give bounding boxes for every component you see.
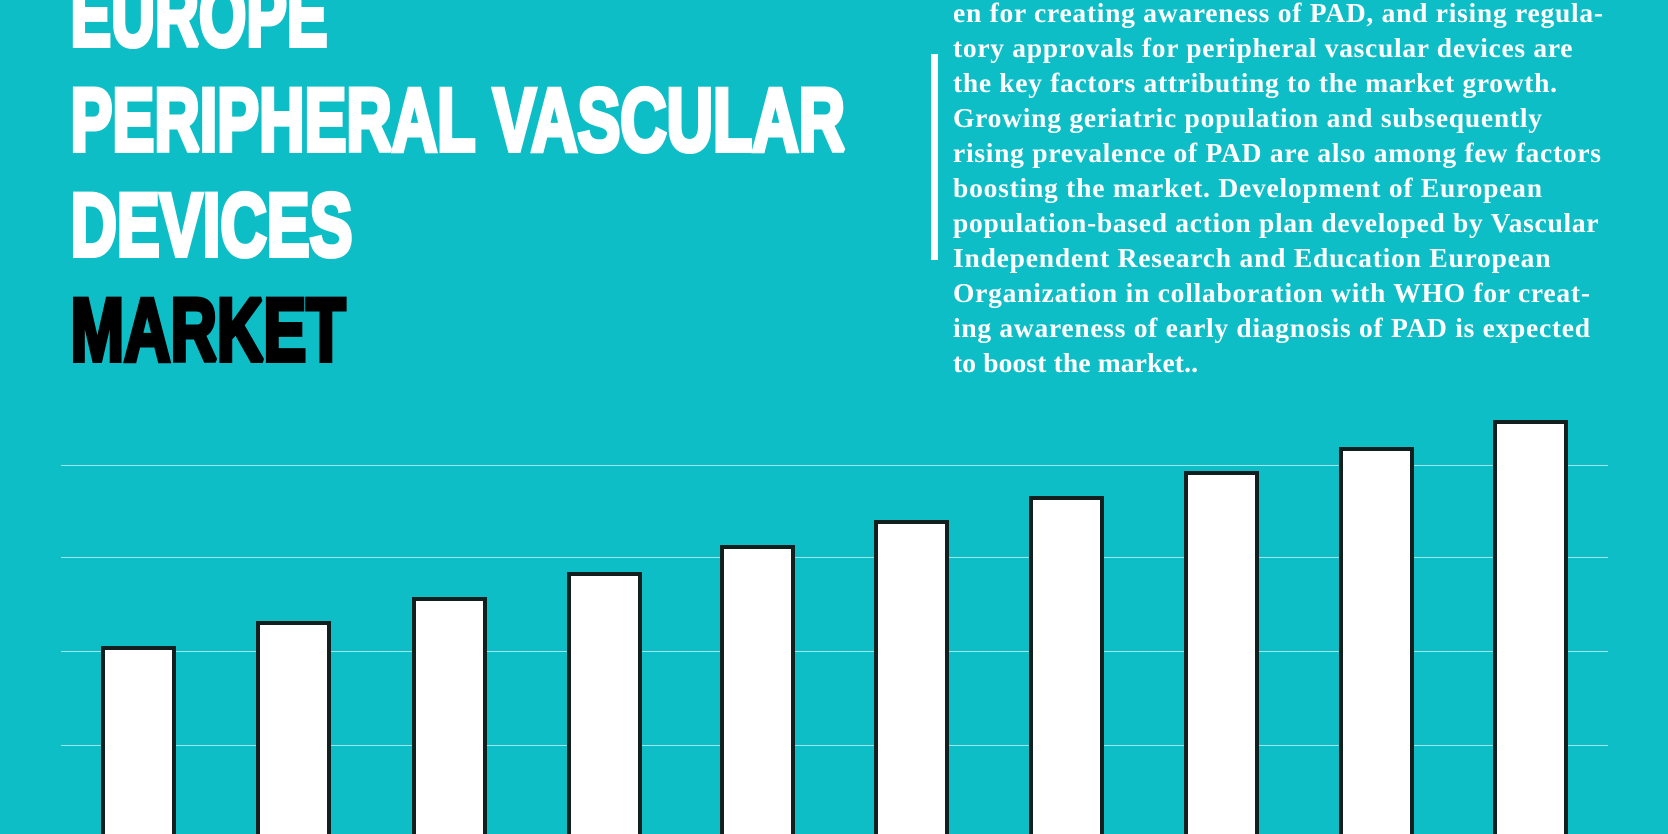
bar 9 — [1341, 449, 1412, 834]
title line: Peripheral Vascular: PERIPHERAL — [70, 70, 476, 170]
bar 10 — [1495, 422, 1566, 834]
bar 1 — [103, 648, 174, 834]
body text block: Organization in collaboration with WHO for creat- — [953, 277, 1590, 308]
body text block: boosting the market. Development of European — [953, 172, 1542, 203]
bar 8 — [1186, 473, 1257, 834]
body text block: rising prevalence of PAD are also among few factors — [953, 137, 1601, 168]
vertical accent bar — [931, 54, 938, 260]
body text block — [953, 0, 1603, 378]
body text block: Growing geriatric population and subsequently — [953, 102, 1542, 133]
bar 5 — [722, 547, 793, 834]
body text block: population-based action plan developed by Vascular — [953, 207, 1598, 238]
title line: Peripheral Vascular: VASCULAR — [493, 70, 845, 170]
body text block: ing awareness of early diagnosis of PAD is expected — [953, 312, 1590, 343]
body text block: to boost the market.. — [953, 347, 1198, 378]
chart gridlines — [61, 466, 1608, 746]
body text block: Independent Research and Education European — [953, 242, 1550, 273]
title — [70, 0, 845, 380]
body text block: tory approvals for peripheral vascular devices are — [953, 32, 1572, 63]
bar chart — [103, 422, 1566, 834]
title line: Devices: DEVICES — [70, 174, 352, 274]
bar 4 — [569, 574, 640, 834]
body text block: the key factors attributing to the market growth. — [953, 67, 1557, 98]
bar 6 — [876, 522, 947, 834]
bar 7 — [1031, 498, 1102, 834]
bar 2 — [258, 623, 329, 834]
title line: Market: MARKET — [70, 280, 346, 380]
bar 3 — [414, 599, 485, 834]
